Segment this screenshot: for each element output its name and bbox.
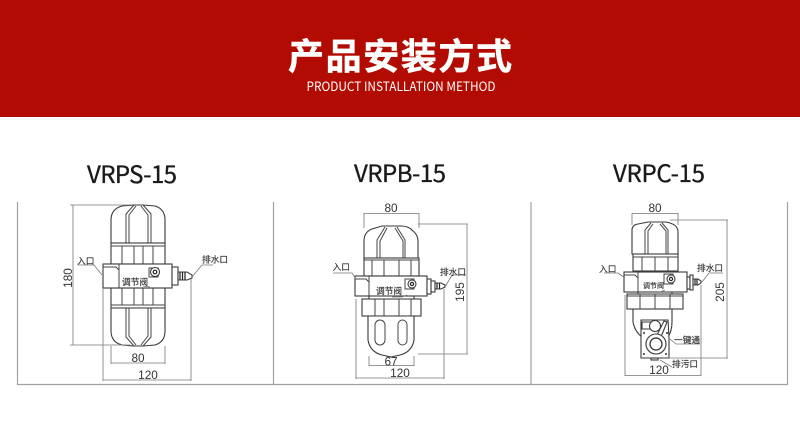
dimension lines <box>333 213 468 379</box>
valve body <box>103 264 192 288</box>
dimension 120: 120 <box>390 366 410 380</box>
one-key drain block <box>641 320 669 360</box>
drawing frame <box>18 202 788 384</box>
model label VRPB-15: VRPB-15 <box>354 154 446 189</box>
dimension 180: 180 <box>61 268 75 288</box>
label 入口: 入口 <box>332 262 350 272</box>
lower bowl <box>633 309 672 337</box>
label 排污口: 排污口 <box>672 358 698 369</box>
bottom hex nut <box>627 294 683 309</box>
label 排水口: 排水口 <box>202 254 228 264</box>
dimension 195: 195 <box>453 282 467 302</box>
header banner <box>0 0 800 117</box>
diagram: VRPB-15 <box>332 201 468 380</box>
dimension 205: 205 <box>713 282 727 302</box>
label 一键通: 一键通 <box>674 334 700 345</box>
bottom hex nut <box>362 299 421 316</box>
label 排水口: 排水口 <box>697 262 723 273</box>
diagram: VRPS-15 <box>61 205 228 382</box>
top bowl <box>364 226 418 258</box>
subtitle: PRODUCT INSTALLATION METHOD <box>306 76 496 95</box>
dimension 80: 80 <box>131 351 145 365</box>
dimension lines <box>604 213 728 376</box>
clear bowl <box>368 316 414 357</box>
label 调节阀: 调节阀 <box>643 281 664 290</box>
lower hex nut <box>111 288 165 308</box>
label 调节阀: 调节阀 <box>122 277 148 287</box>
title: 产品安装方式 <box>288 28 512 80</box>
label 入口: 入口 <box>599 264 616 274</box>
top bowl <box>632 222 678 254</box>
label 调节阀: 调节阀 <box>376 286 402 296</box>
upper hex nut <box>111 243 165 264</box>
valve body <box>355 276 445 299</box>
model label VRPC-15: VRPC-15 <box>613 154 705 189</box>
dimension 80: 80 <box>648 201 662 215</box>
lower bowl <box>111 308 165 346</box>
dimension 120: 120 <box>138 368 158 382</box>
valve body <box>624 272 701 294</box>
dimension 80: 80 <box>384 201 398 215</box>
dimension 120: 120 <box>649 363 669 377</box>
label 入口: 入口 <box>77 256 94 266</box>
dimension 67: 67 <box>384 354 398 368</box>
diagram: VRPC-15 <box>599 201 728 377</box>
label 排水口: 排水口 <box>440 266 466 277</box>
dimension lines <box>70 205 213 381</box>
model label VRPS-15: VRPS-15 <box>87 155 177 190</box>
top hex nut <box>364 258 419 276</box>
top hex nut <box>633 254 678 271</box>
upper bowl <box>111 205 165 243</box>
